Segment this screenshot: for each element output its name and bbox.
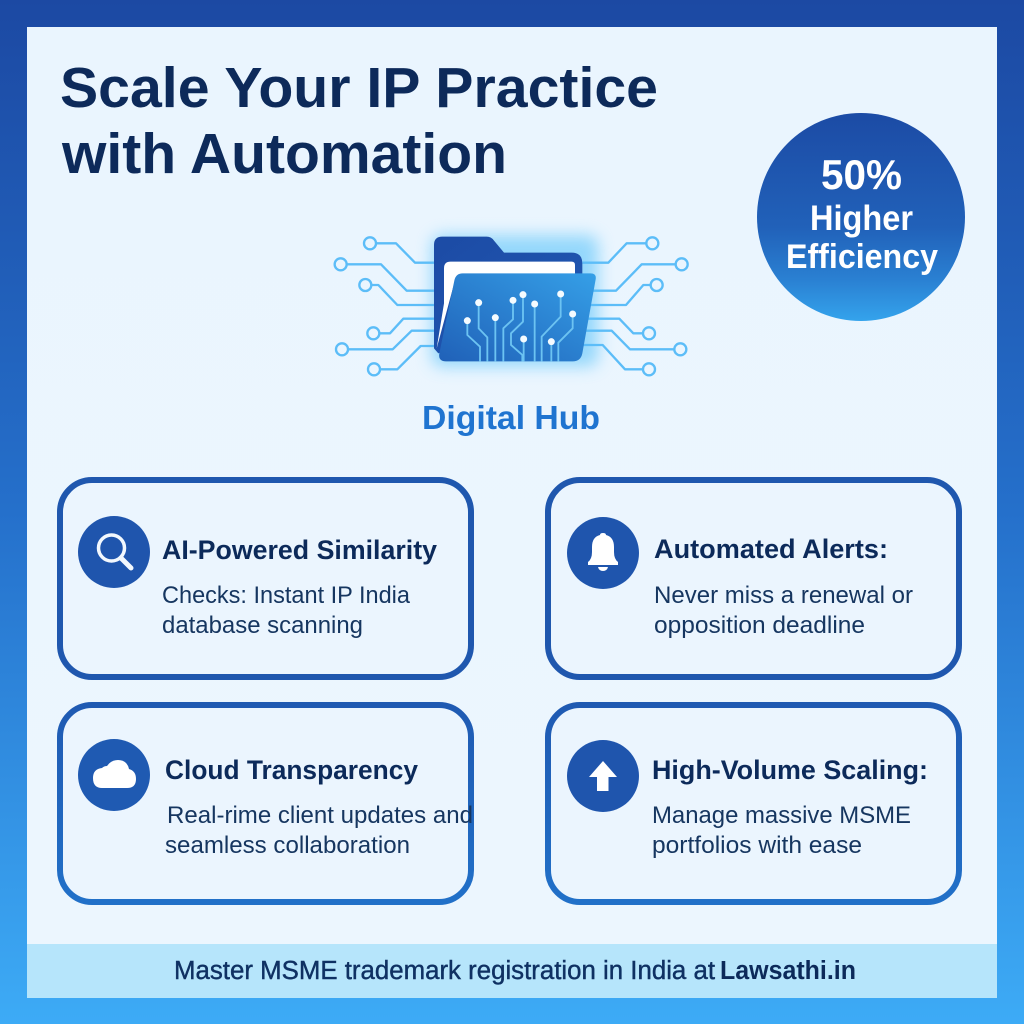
circuit traces right	[582, 237, 688, 375]
folder circuit lines	[467, 294, 573, 361]
badge: 50% higher efficiency: 50%	[821, 151, 902, 198]
footer band: Master MSME trademark registration in India at	[174, 957, 715, 985]
icon: bell	[567, 517, 639, 589]
card: cloud transparency: Real-rime client updates and	[167, 802, 473, 829]
card: automated alerts: opposition deadline	[654, 612, 865, 639]
card: cloud transparency	[60, 705, 473, 902]
folder front	[439, 273, 596, 361]
card: cloud transparency: Cloud Transparency	[165, 755, 418, 785]
folder glow	[432, 235, 598, 367]
card: automated alerts: Never miss a renewal or	[654, 582, 913, 609]
card: cloud transparency: seamless collaboration	[165, 832, 410, 859]
folder back	[434, 237, 582, 353]
digital hub label: Digital Hub	[422, 399, 600, 436]
card: high-volume scaling: Manage massive MSME	[652, 802, 911, 829]
footer band	[27, 944, 997, 998]
white sheet	[437, 262, 575, 348]
badge: 50% higher efficiency: Efficiency	[786, 238, 938, 276]
card: AI-powered similarity: AI-Powered Similarity	[162, 535, 437, 565]
icon: cloud	[78, 739, 150, 811]
card: automated alerts: Automated Alerts:	[654, 534, 888, 564]
circuit traces left	[335, 237, 435, 375]
title: Scale Your IP Practice	[60, 56, 658, 120]
folder circuit nodes	[464, 290, 576, 345]
card: AI-powered similarity: Checks: Instant IP India	[162, 582, 410, 609]
digital hub folder illustration	[335, 235, 688, 375]
card: high-volume scaling: portfolios with ease	[652, 832, 862, 859]
footer band: Lawsathi.in	[720, 957, 856, 985]
card: high-volume scaling: High-Volume Scaling:	[652, 755, 928, 785]
card: AI-powered similarity	[60, 480, 471, 677]
card: high-volume scaling	[548, 705, 959, 902]
card: AI-powered similarity: database scanning	[162, 612, 363, 639]
title: with Automation	[61, 122, 507, 186]
title	[60, 56, 658, 186]
card: automated alerts	[548, 480, 959, 677]
icon: up arrow	[567, 740, 639, 812]
badge: 50% higher efficiency	[757, 113, 965, 321]
badge: 50% higher efficiency: Higher	[810, 199, 913, 238]
icon: magnifying glass	[78, 516, 150, 588]
